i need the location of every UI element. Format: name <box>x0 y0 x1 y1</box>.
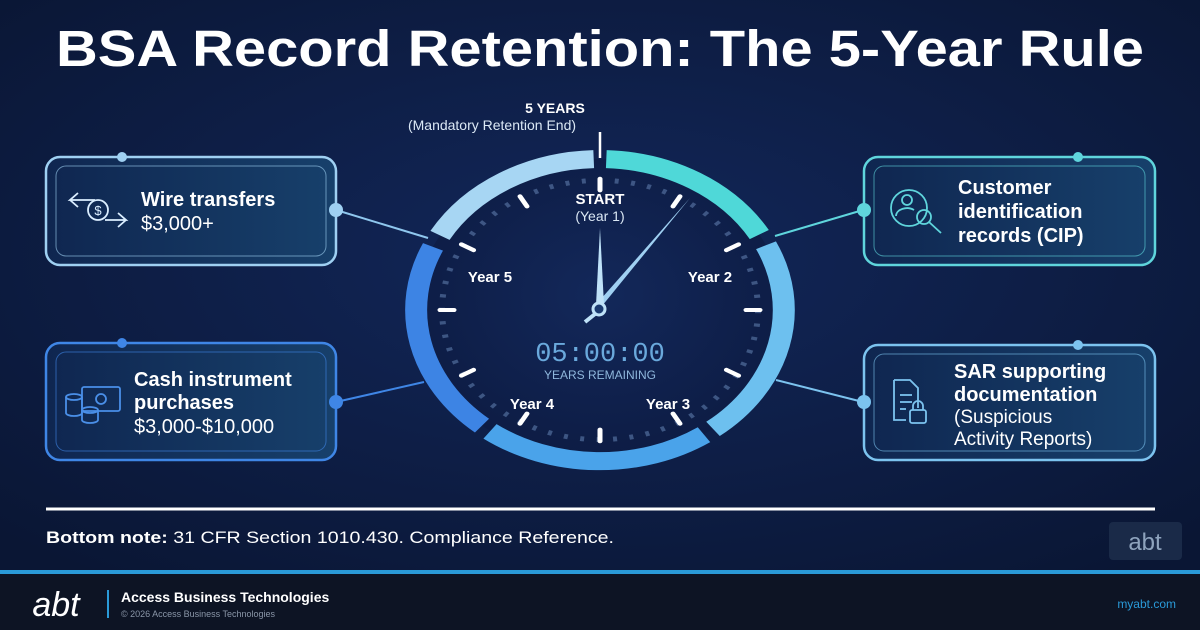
footer: © 2026 Access Business Technologies <box>121 609 276 619</box>
retention end label <box>408 100 585 133</box>
icon: user search <box>891 190 941 233</box>
card: SAR documentation: documentation <box>954 384 1097 406</box>
clock: 05:00:00 <box>535 340 665 370</box>
clock: Year 3 <box>646 396 690 413</box>
clock: Year 5 <box>468 269 512 286</box>
clock: Year 2 <box>688 269 732 286</box>
retention end label: (Mandatory Retention End) <box>408 117 576 133</box>
card: wire transfers: Wire transfers <box>141 189 275 211</box>
card: cash instrument purchases: $3,000-$10,000 <box>134 416 274 438</box>
icon: cash and coins <box>66 387 120 423</box>
icon: document lock <box>894 380 926 423</box>
hands <box>600 198 690 306</box>
card: wire transfers: $3,000+ <box>141 213 214 235</box>
icon: money transfer: $ <box>94 203 102 218</box>
card: SAR documentation: SAR supporting <box>954 361 1106 383</box>
card: wire transfers <box>46 152 343 265</box>
title: BSA Record Retention: The 5-Year Rule <box>56 20 1144 77</box>
clock: (Year 1) <box>575 208 625 224</box>
retention end label: 5 YEARS <box>525 100 585 116</box>
card: SAR documentation: Activity Reports) <box>954 429 1092 450</box>
small logo: abt <box>1128 529 1162 556</box>
card: customer identification: records (CIP) <box>958 225 1084 247</box>
clock labels: START <box>576 191 624 208</box>
card: cash instrument purchases: purchases <box>134 392 234 414</box>
footer: Access Business Technologies <box>121 589 329 605</box>
footer: abt <box>32 586 81 624</box>
card: customer identification: Customer <box>958 177 1052 199</box>
small logo <box>1109 522 1182 560</box>
retention marker <box>599 132 601 158</box>
clock: Year 4 <box>510 396 555 413</box>
icon: money transfer <box>70 193 126 227</box>
bottom note: Bottom note: 31 CFR Section 1010.430. Compliance Reference. <box>46 528 614 547</box>
connector lines <box>336 210 863 402</box>
footer <box>0 570 1200 630</box>
clock <box>416 132 784 461</box>
card: SAR documentation: (Suspicious <box>954 407 1052 428</box>
card: cash instrument purchases <box>46 338 343 460</box>
card: cash instrument purchases: Cash instrument <box>134 369 292 391</box>
footer: myabt.com <box>1117 597 1176 611</box>
card: customer identification <box>857 152 1155 265</box>
card: customer identification: identification <box>958 201 1082 223</box>
clock: YEARS REMAINING <box>544 368 656 382</box>
card: SAR documentation <box>857 340 1155 460</box>
